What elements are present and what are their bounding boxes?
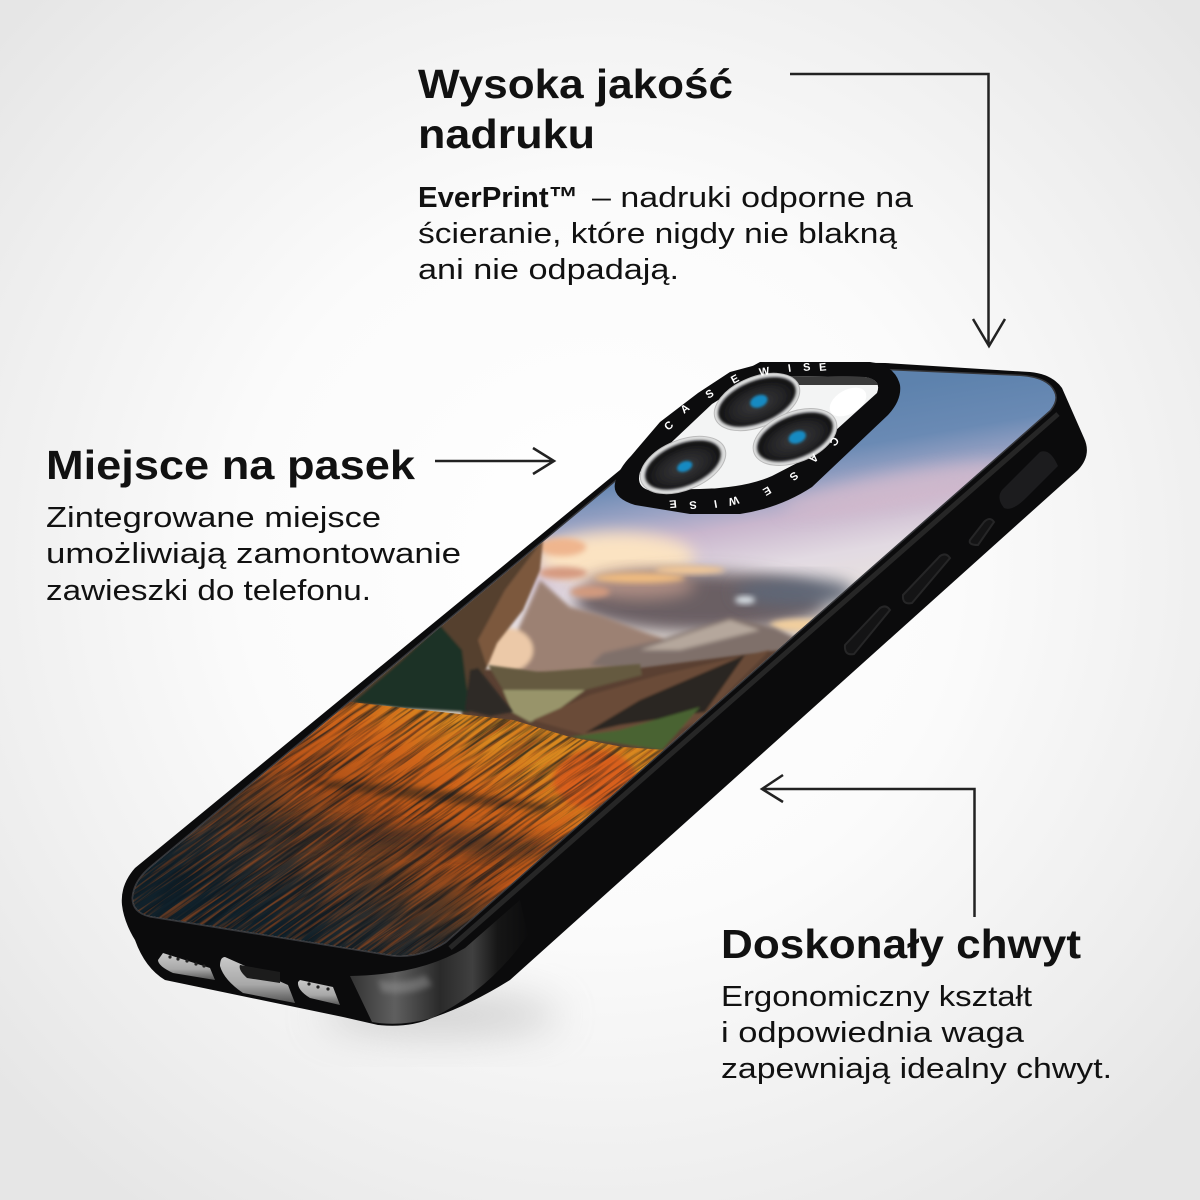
corner reflection highlight [378, 975, 432, 993]
text: grip: Ergonomiczny kształt [721, 981, 1032, 1013]
window inner shadow [735, 376, 878, 392]
top lens [706, 362, 808, 442]
cliff [344, 541, 544, 717]
dark hill shadow [585, 655, 745, 733]
text: grip: i odpowiednia waga [721, 1017, 1025, 1049]
dark rock [465, 668, 513, 716]
text: print quality: – nadruki odporne na [592, 182, 914, 214]
volume up [903, 554, 950, 603]
side buttons [845, 451, 1058, 654]
callout: strap slot [46, 442, 461, 607]
text: grip: zapewniają idealny chwyt. [721, 1053, 1112, 1085]
camera island [615, 361, 900, 514]
text: print quality: EverPrint™ [418, 182, 578, 214]
callout: grip [721, 921, 1112, 1085]
text: strap slot: Zintegrowane miejsce [46, 502, 381, 534]
arrow: strap slot [435, 448, 554, 474]
long side rim sheen [450, 414, 1058, 948]
right speaker grille [298, 980, 340, 1005]
pine trees [353, 625, 470, 712]
valley lake [503, 690, 585, 722]
heading: strap slot: Miejsce na pasek [46, 442, 415, 488]
back hills [488, 664, 642, 690]
text: grip [721, 981, 1112, 1085]
print rim [133, 370, 1055, 955]
brand text upper: CASEWISE [662, 361, 827, 433]
sky haze streak [786, 456, 998, 512]
green hill patch [570, 707, 700, 750]
side switch [999, 451, 1058, 509]
heading: print quality: Wysoka jakość [418, 61, 733, 107]
heading: grip: Doskonały chwyt [721, 921, 1081, 967]
right lens [745, 397, 845, 477]
lower dark band [230, 814, 570, 862]
distant mountains [488, 579, 794, 674]
sky [133, 370, 1056, 956]
case body [122, 362, 1087, 1026]
bottom corner sheen [350, 900, 528, 1024]
orange highlight [553, 750, 637, 810]
charging port [220, 957, 295, 1003]
cliff rock [344, 542, 544, 708]
valley scenery [460, 650, 780, 775]
text: strap slot: umożliwiają zamontowanie [46, 538, 461, 570]
text: strap slot [46, 502, 461, 607]
arrow: grip [762, 775, 974, 917]
streaks [133, 702, 663, 956]
brand text lower: ESIWESAC [669, 434, 841, 511]
small button [970, 519, 994, 545]
text: print quality: ani nie odpadają. [418, 254, 679, 286]
phone drop shadow [320, 995, 560, 1035]
valley base [460, 650, 780, 775]
printed landscape [133, 370, 1056, 956]
clouds [535, 532, 855, 632]
text: strap slot: zawieszki do telefonu. [46, 575, 371, 607]
dark field band [310, 776, 550, 814]
volume down [845, 606, 890, 654]
camera ring [615, 362, 900, 514]
text: print quality [418, 182, 914, 286]
heading: print quality: nadruku [418, 111, 595, 157]
heading: print quality [418, 61, 733, 157]
camera window [639, 376, 878, 490]
left speaker grille [158, 953, 215, 980]
field [133, 702, 664, 956]
right hillside [534, 650, 770, 735]
arrow: print quality [790, 74, 1005, 346]
callout: print quality [418, 61, 914, 286]
flash [825, 382, 871, 422]
cliff lit face [478, 540, 543, 667]
text: print quality: ścieranie, które nigdy nie blakną [418, 218, 898, 250]
phone case illustration [122, 362, 1087, 1026]
left lens [632, 425, 734, 505]
